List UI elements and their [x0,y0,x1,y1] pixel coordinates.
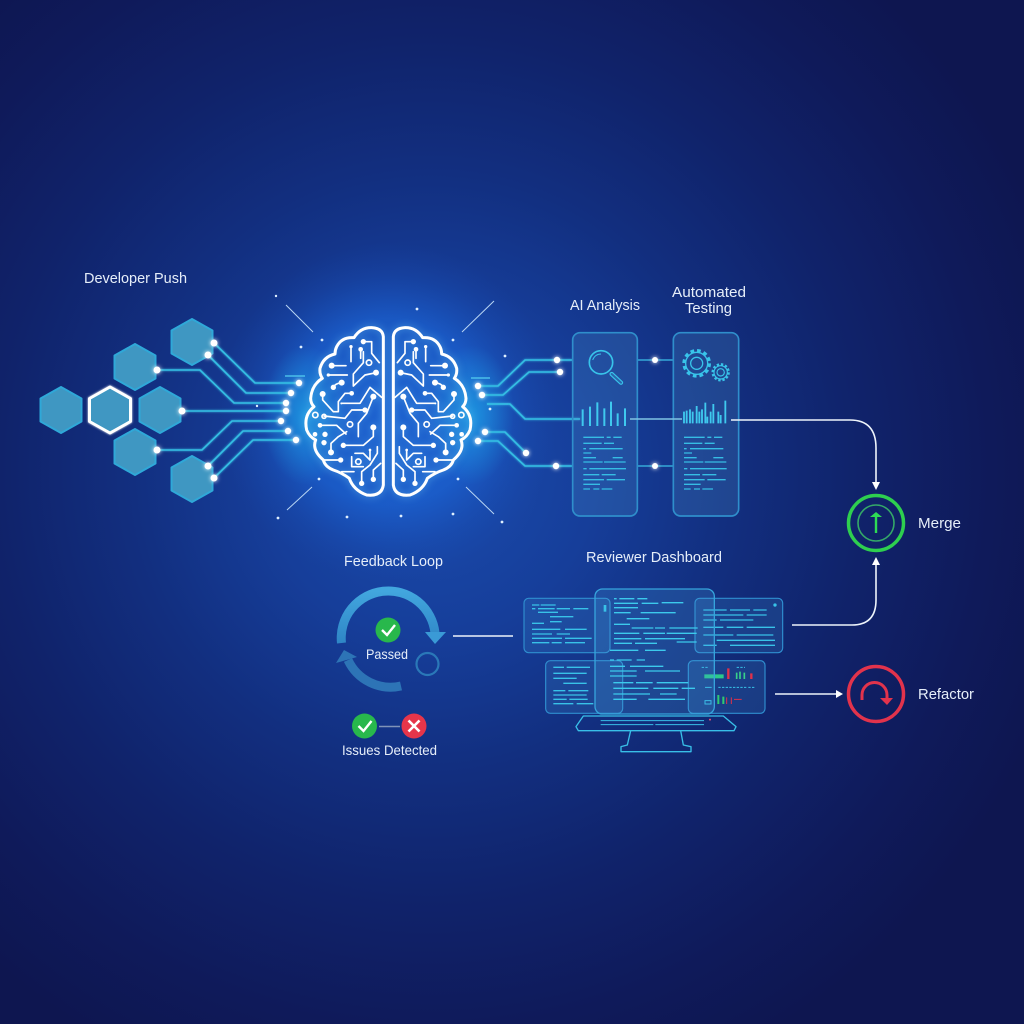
arrow: testing to merge [731,420,880,490]
reviewer dashboard [524,589,783,752]
analysis link between panels [630,418,682,420]
bar chart [684,401,725,423]
icon: magnifier [589,351,621,383]
arrow: dashboard to refactor [775,690,843,698]
panel: AI Analysis [573,333,637,516]
right hemisphere [393,328,471,495]
heading: Automated Testing: Testing [685,301,732,317]
connector traces: brain to panels [478,360,580,466]
text lines [583,437,626,489]
brain glow [218,242,558,582]
hexagon centre [140,387,180,433]
icon: gears [684,351,729,380]
heading: Reviewer Dashboard: Reviewer Dashboard [586,550,722,566]
heading: AI Analysis: AI Analysis [570,298,640,314]
icon: refactor [848,666,904,722]
arrow: dashboard to merge [792,557,880,625]
hexagon far left [40,387,82,433]
label: Issues Detected: Issues Detected [342,742,437,758]
connector traces: hexagons to brain [157,343,299,478]
icon: circuit brain [306,328,471,495]
label: Passed: Passed [366,646,408,662]
screen: bottom right with chart [688,661,765,713]
brain blur halo [306,328,471,495]
icon: feedback cycle arrows [336,591,446,687]
bar chart [583,402,625,426]
right node dots [475,357,658,469]
heading: Automated Testing: Automated [672,285,746,301]
hexagon highlighted [90,387,130,433]
panel: Automated Testing [673,333,739,516]
label: Merge: Merge [918,516,961,532]
screen: centre [595,589,714,714]
sparkle rays and particles [256,295,508,523]
screen: top right [695,598,783,653]
icon: passed check [376,618,400,642]
connector node dots [154,340,302,482]
label: Refactor: Refactor [918,687,974,703]
screen: bottom left [546,661,623,713]
heading: Automated Testing [672,285,746,317]
icon: merge [848,496,904,550]
heading: Developer Push: Developer Push [84,271,187,287]
hexagon upper [114,344,156,390]
hexagon cluster [40,319,212,502]
hexagon top [172,319,212,365]
arrow: feedback link [453,635,513,637]
hexagon bottom [172,456,212,502]
panel connectors [637,360,673,466]
text lines [684,437,727,489]
monitor base and stand [576,716,736,752]
hexagon lower [114,429,156,475]
screen: top left [524,598,610,653]
heading: Feedback Loop: Feedback Loop [344,554,443,570]
icon: issues status pair [352,714,426,738]
left hemisphere [306,328,383,495]
